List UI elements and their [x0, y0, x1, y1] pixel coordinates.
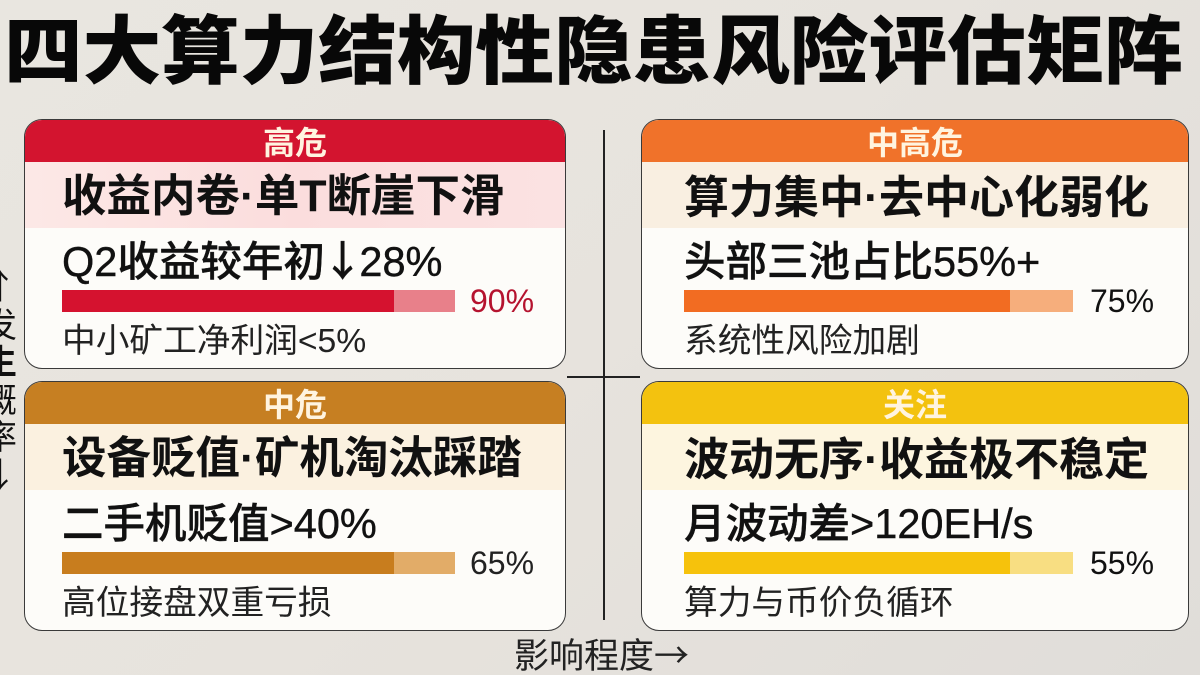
- badge: high risk: 高危: [263, 125, 327, 161]
- note: 中小矿工净利润<5%: [62, 322, 366, 360]
- note: 系统性风险加剧: [684, 322, 920, 360]
- metric: 头部三池占比55%+: [684, 238, 1040, 285]
- panel: high risk: [24, 119, 566, 369]
- badge: medium risk: [25, 382, 565, 424]
- note: 算力与币价负循环: [684, 584, 954, 622]
- badge: high risk: [25, 120, 565, 162]
- badge: watch: [642, 382, 1188, 424]
- progress bar: [62, 290, 455, 312]
- percent: 90%: [470, 283, 534, 319]
- panel: watch: [641, 381, 1189, 631]
- title band: [25, 424, 565, 490]
- percent: 75%: [1090, 283, 1154, 319]
- card heading: 波动无序·收益极不稳定: [684, 434, 1149, 485]
- card heading: 收益内卷·单T断崖下滑: [62, 172, 505, 221]
- panel: medium-high risk: [641, 119, 1189, 369]
- badge: medium risk: 中危: [263, 387, 327, 423]
- badge: watch: 关注: [883, 387, 947, 423]
- metric: 二手机贬值>40%: [62, 500, 377, 547]
- card heading: 算力集中·去中心化弱化: [684, 172, 1149, 223]
- title band: [642, 162, 1188, 228]
- badge: medium-high risk: [642, 120, 1188, 162]
- progress bar: [684, 290, 1073, 312]
- metric: Q2收益较年初↓28%: [62, 228, 442, 288]
- note: 高位接盘双重亏损: [62, 584, 332, 622]
- title band: [642, 424, 1188, 490]
- badge: medium-high risk: 中高危: [867, 125, 963, 161]
- card heading: 设备贬值·矿机淘汰踩踏: [62, 434, 522, 483]
- y axis label: [0, 260, 17, 496]
- title: 四大算力结构性隐患风险评估矩阵: [4, 10, 1183, 94]
- matrix axes: [567, 130, 640, 620]
- progress bar: [62, 552, 455, 574]
- title band: [25, 162, 565, 228]
- progress bar: [684, 552, 1073, 574]
- panel: medium risk: [24, 381, 566, 631]
- percent: 55%: [1090, 545, 1154, 581]
- percent: 65%: [470, 545, 534, 581]
- metric: 月波动差>120EH/s: [684, 500, 1033, 547]
